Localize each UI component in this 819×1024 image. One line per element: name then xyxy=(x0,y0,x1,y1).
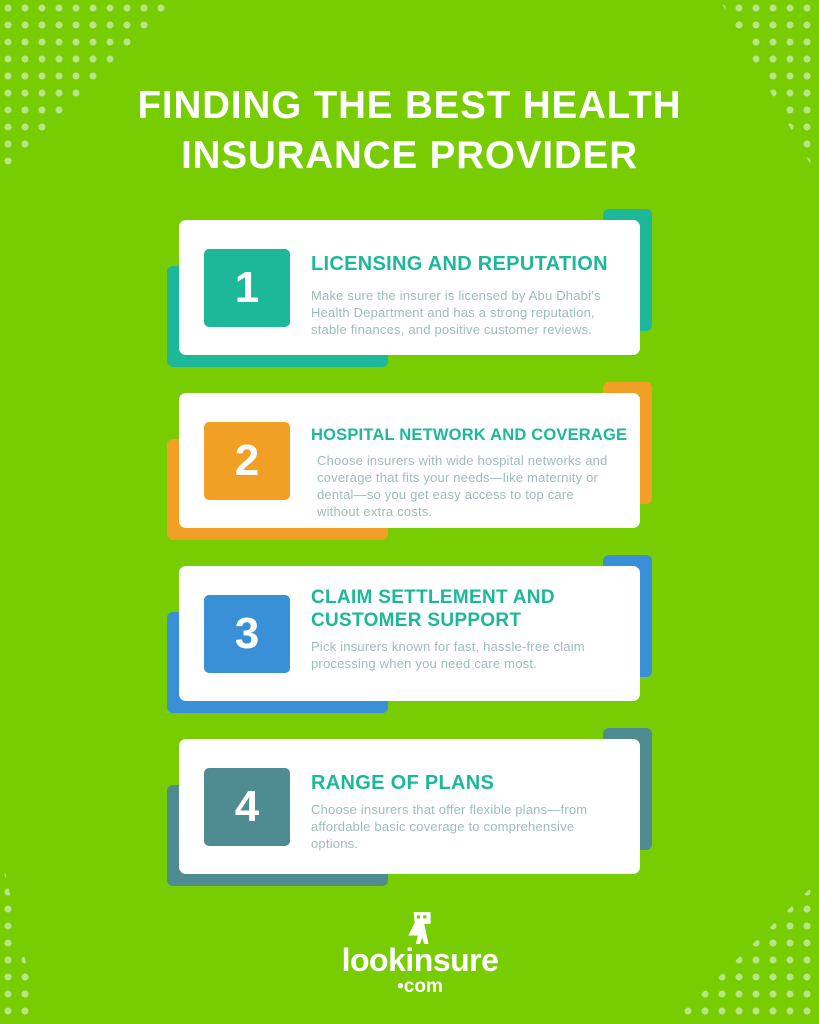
title xyxy=(137,84,682,177)
number 1: 1 xyxy=(235,263,259,312)
number 3: 3 xyxy=(235,609,259,658)
title: INSURANCE PROVIDER xyxy=(181,134,638,177)
panel: card 3 xyxy=(167,555,652,713)
text 2: Choose insurers with wide hospital networks and xyxy=(317,453,608,468)
number 2 xyxy=(204,422,290,500)
heading 3: CLAIM SETTLEMENT AND xyxy=(311,587,555,608)
title: FINDING THE BEST HEALTH xyxy=(137,84,682,127)
heading 4: RANGE OF PLANS xyxy=(311,772,494,794)
logo: •com xyxy=(397,976,443,997)
number 3 xyxy=(204,595,290,673)
heading 2: HOSPITAL NETWORK AND COVERAGE xyxy=(311,426,627,444)
text 2: dental—so you get easy access to top care xyxy=(317,487,574,502)
number 4 xyxy=(204,768,290,846)
number 4: 4 xyxy=(235,782,259,831)
number 2: 2 xyxy=(235,436,259,485)
text 2: coverage that fits your needs—like maternity or xyxy=(317,470,598,485)
text 2 xyxy=(317,453,608,519)
text 1: Make sure the insurer is licensed by Abu Dhabi’s Health Department and has a strong reputation, stable finances, and positive customer reviews. xyxy=(311,288,601,337)
panel: card 4 xyxy=(167,728,652,886)
text 3: Pick insurers known for fast, hassle-free claim processing when you need care most. xyxy=(311,639,585,671)
panel: card 1 xyxy=(167,209,652,367)
number 1 xyxy=(204,249,290,327)
text 2: without extra costs. xyxy=(317,504,432,519)
icon: dino xyxy=(408,912,431,944)
logo: lookinsure xyxy=(342,942,498,978)
heading 3 xyxy=(311,587,555,631)
text 4: Choose insurers that offer flexible plans—from affordable basic coverage to comprehensive options. xyxy=(311,802,587,851)
heading 1: LICENSING AND REPUTATION xyxy=(311,253,608,275)
panel: card 2 xyxy=(167,382,652,540)
heading 3: CUSTOMER SUPPORT xyxy=(311,610,521,631)
logo xyxy=(342,912,498,997)
